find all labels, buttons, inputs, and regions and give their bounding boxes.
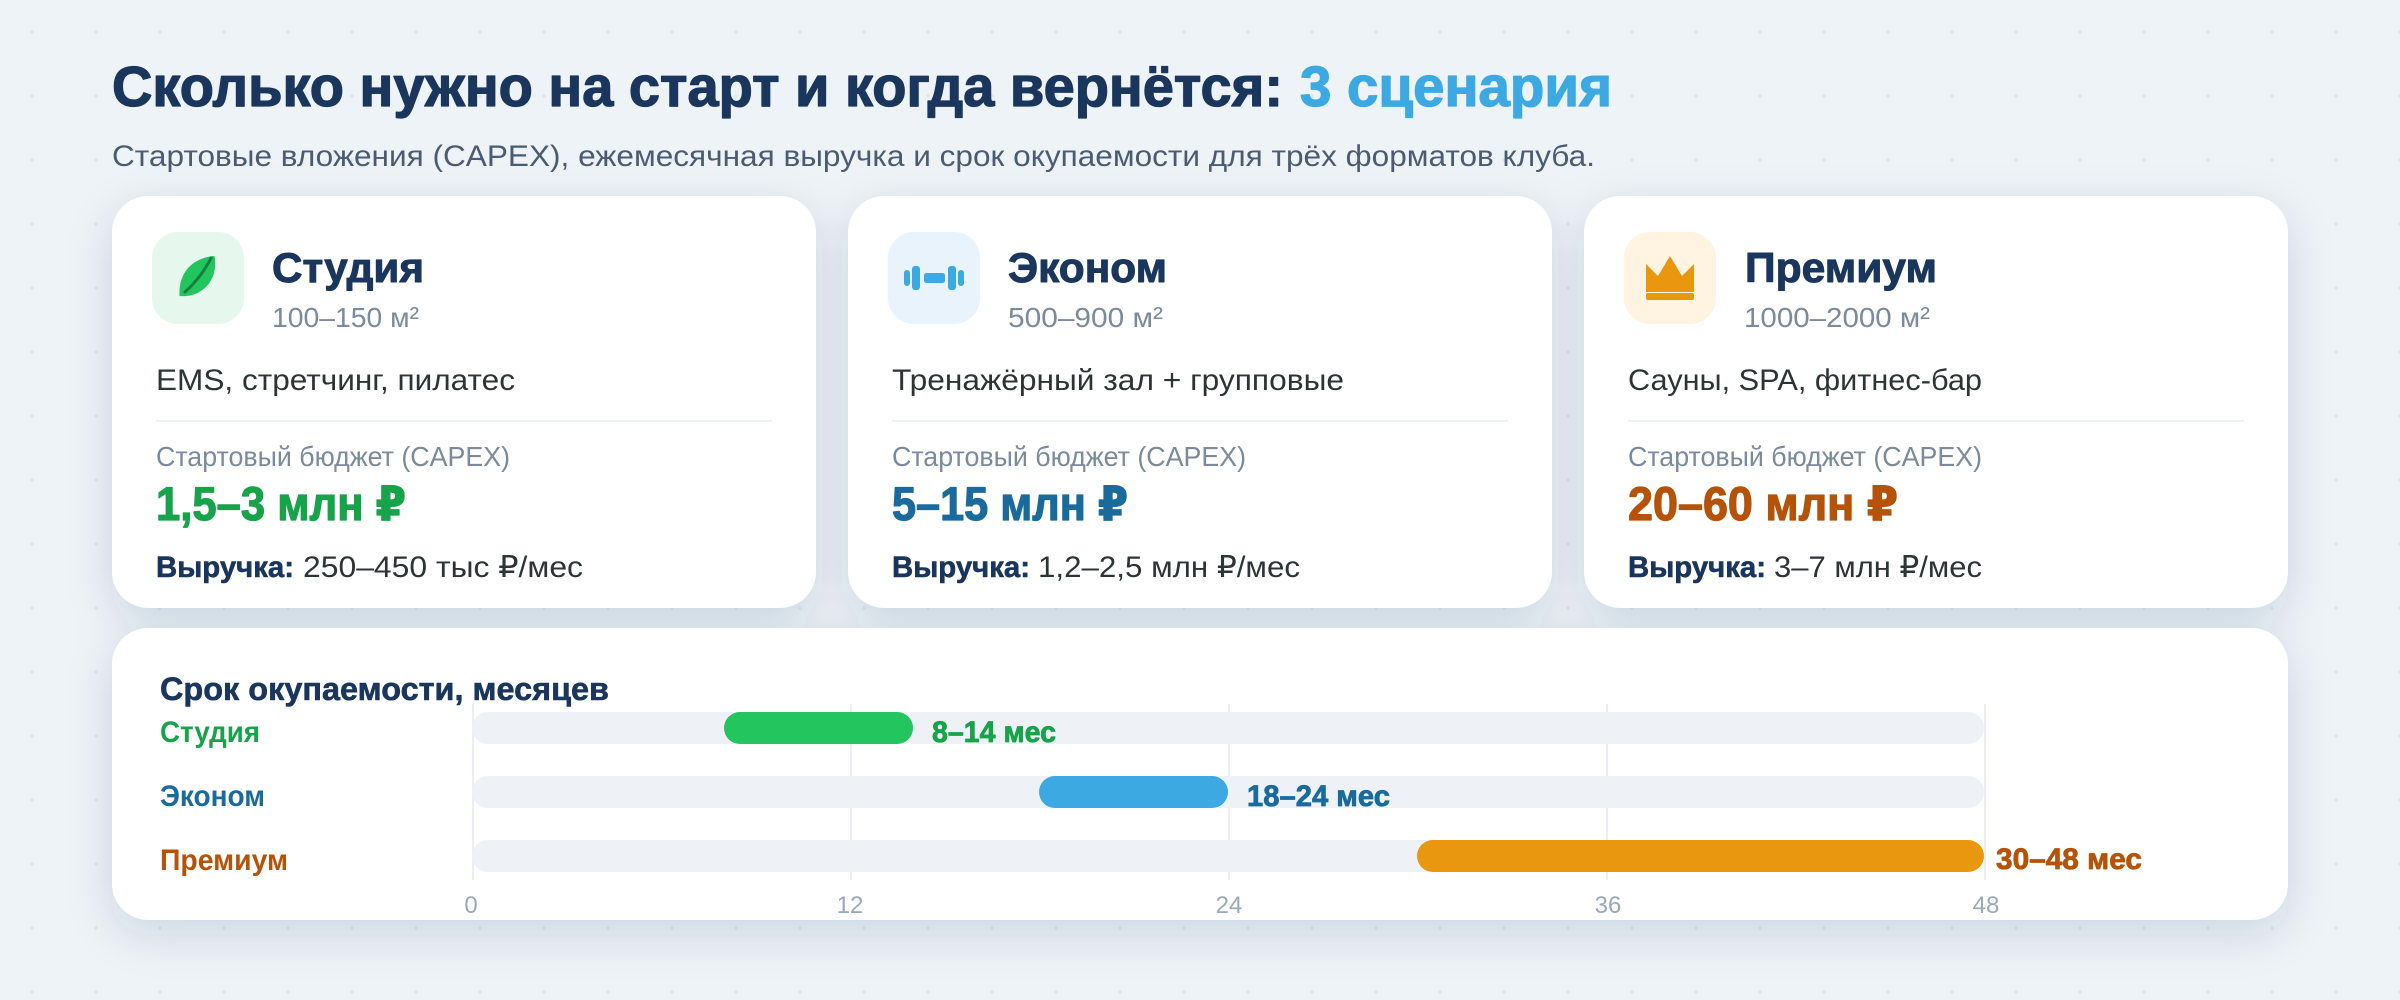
- row: Премиум: [160, 840, 2142, 877]
- icon: crown: [1624, 232, 1716, 324]
- axis labels: [464, 892, 1999, 919]
- row: Студия: 8–14 мес: [932, 716, 1056, 749]
- panel: Премиум: [1584, 196, 2288, 608]
- row: Студия: Студия: [160, 716, 260, 749]
- revenue: [892, 551, 1300, 584]
- revenue: 1,2–2,5 млн ₽/мес: [1038, 551, 1300, 584]
- formats: Сауны, SPA, фитнес-бар: [1628, 364, 1982, 397]
- formats: EMS, стретчинг, пилатес: [156, 364, 515, 397]
- row: Эконом: [160, 776, 1984, 813]
- icon: dumbbell: [888, 232, 980, 324]
- budget label: Стартовый бюджет (CAPEX): [156, 441, 510, 472]
- plan name: Премиум: [1745, 244, 1937, 291]
- budget value: 5–15 млн ₽: [892, 477, 1128, 530]
- row: Эконом: 18–24 мес: [1247, 780, 1390, 813]
- budget value: 20–60 млн ₽: [1628, 477, 1898, 530]
- budget label: Стартовый бюджет (CAPEX): [892, 441, 1246, 472]
- chart heading: Срок окупаемости, месяцев: [160, 671, 609, 707]
- row: Премиум: 30–48 мес: [1996, 843, 2142, 876]
- area: 500–900 м²: [1008, 302, 1163, 333]
- plan name: Эконом: [1008, 244, 1167, 291]
- area: 100–150 м²: [272, 302, 419, 333]
- title: Сколько нужно на старт и когда вернётся:: [112, 55, 1283, 119]
- revenue: Выручка:: [1628, 551, 1766, 584]
- axis labels: 48: [1973, 892, 1999, 919]
- panel: Студия: [112, 196, 816, 608]
- row: Эконом: Эконом: [160, 780, 265, 813]
- plan name: Студия: [272, 244, 424, 291]
- revenue: Выручка:: [156, 551, 294, 584]
- title: 3 сценария: [1300, 55, 1612, 119]
- revenue: 250–450 тыс ₽/мес: [303, 551, 583, 584]
- revenue: [156, 551, 583, 584]
- revenue: 3–7 млн ₽/мес: [1774, 551, 1982, 584]
- panel: Эконом: [848, 196, 1552, 608]
- row: Студия: [160, 712, 1984, 749]
- row: Премиум: Премиум: [160, 844, 288, 877]
- formats: Тренажёрный зал + групповые: [892, 364, 1344, 397]
- subtitle: Стартовые вложения (CAPEX), ежемесячная выручка и срок окупаемости для трёх форматов клуба.: [112, 140, 1595, 173]
- panel: payback chart: [112, 628, 2288, 920]
- area: 1000–2000 м²: [1744, 302, 1930, 333]
- revenue: [1628, 551, 1982, 584]
- icon: leaf: [152, 232, 244, 324]
- revenue: Выручка:: [892, 551, 1030, 584]
- axis labels: 24: [1216, 892, 1242, 919]
- axis labels: 0: [464, 892, 478, 919]
- axis labels: 36: [1595, 892, 1621, 919]
- budget label: Стартовый бюджет (CAPEX): [1628, 441, 1982, 472]
- budget value: 1,5–3 млн ₽: [156, 477, 406, 530]
- axis labels: 12: [837, 892, 863, 919]
